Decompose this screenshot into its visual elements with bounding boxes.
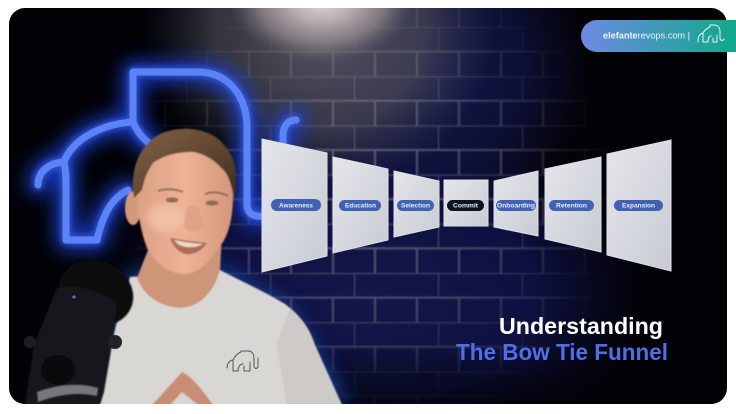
title bbox=[456, 313, 668, 365]
stage: Retention bbox=[545, 157, 601, 252]
mic foam head bbox=[59, 260, 134, 324]
microphone bbox=[24, 260, 134, 404]
stage: Commit bbox=[444, 180, 488, 226]
stage: Awareness bbox=[262, 139, 327, 272]
bow tie funnel diagram bbox=[262, 139, 671, 272]
stage: Selection: Selection bbox=[401, 203, 430, 210]
face bbox=[137, 146, 233, 274]
presenter bbox=[24, 129, 350, 405]
stage: Education: Education bbox=[345, 203, 376, 210]
stage: Education bbox=[333, 157, 388, 253]
icon: elephant bbox=[698, 25, 724, 42]
website badge bbox=[581, 20, 736, 52]
badge text: elefanterevops.com | bbox=[603, 30, 690, 42]
title: The Bow Tie Funnel bbox=[456, 339, 668, 365]
mic lens bbox=[41, 355, 75, 385]
hands bbox=[152, 372, 213, 405]
blue halo behind presenter bbox=[112, 258, 356, 404]
eyebrows and eyes bbox=[158, 189, 228, 206]
stage: Selection bbox=[394, 171, 439, 237]
ears bbox=[125, 191, 141, 225]
t-shirt shading bbox=[276, 308, 342, 405]
t-shirt bbox=[96, 270, 342, 405]
stage: Onboarding: Onboarding bbox=[497, 203, 535, 210]
mic body bbox=[25, 287, 117, 405]
stage: Commit: Commit bbox=[453, 203, 479, 210]
mouth bbox=[170, 238, 207, 254]
shirt elephant logo bbox=[227, 351, 258, 371]
stage: Onboarding bbox=[494, 171, 538, 236]
stage: Awareness: Awareness bbox=[279, 203, 313, 210]
neck bbox=[136, 244, 222, 309]
neon elephant sign bbox=[38, 72, 296, 240]
mic knobs bbox=[24, 336, 36, 348]
title: Understanding bbox=[499, 313, 663, 339]
cheek highlight bbox=[147, 204, 183, 232]
nose bbox=[184, 205, 202, 231]
hair bbox=[133, 129, 236, 202]
stage: Expansion: Expansion bbox=[622, 203, 655, 210]
stage: Expansion bbox=[607, 140, 671, 271]
stage: Retention: Retention bbox=[556, 203, 587, 210]
